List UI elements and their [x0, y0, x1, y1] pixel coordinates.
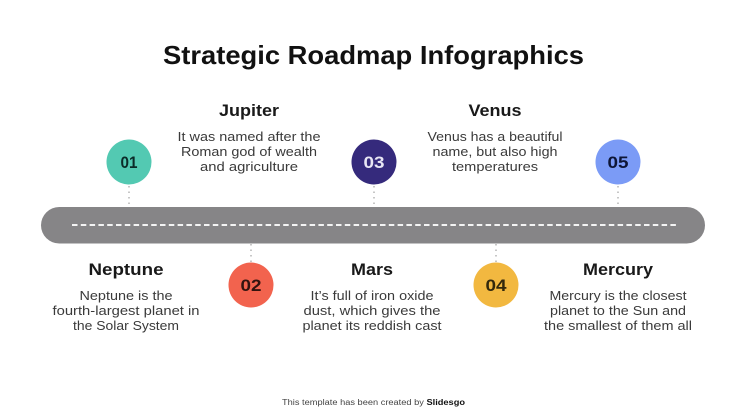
- milestone 05 marker: 05: [608, 153, 628, 172]
- text block: Mercury: [544, 261, 692, 333]
- milestone 01 marker: 01: [120, 153, 138, 172]
- milestone 04 marker: 04: [486, 276, 507, 295]
- text block: Venus: Venus has a beautiful: [428, 129, 563, 144]
- milestone 03 marker: 03: [364, 153, 384, 172]
- text block: Jupiter: [178, 102, 320, 174]
- text block: Neptune: the Solar System: [73, 318, 179, 333]
- text block: Neptune: Neptune is the: [80, 288, 172, 303]
- text block: Neptune: Neptune: [88, 261, 164, 279]
- text block: Venus: name, but also high: [432, 144, 558, 159]
- milestone 05 marker: [596, 140, 640, 206]
- title: Strategic Roadmap Infographics: [163, 40, 584, 70]
- text block: Neptune: fourth-largest planet in: [52, 303, 200, 318]
- road timeline: [41, 207, 705, 244]
- text block: Mercury: the smallest of them all: [544, 318, 692, 333]
- milestone 02 marker: 02: [240, 276, 262, 295]
- text block: Jupiter: Roman god of wealth: [181, 144, 317, 159]
- milestone 01 marker: [106, 140, 152, 206]
- milestone 03 marker: [352, 140, 396, 206]
- text block: Venus: [428, 102, 563, 174]
- text block: Jupiter: and agriculture: [200, 159, 298, 174]
- text block: Mercury: Mercury: [583, 261, 654, 279]
- text block: Jupiter: It was named after the: [178, 129, 320, 144]
- footer credit: This template has been created by Slidesgo: [282, 398, 465, 407]
- text block: Mars: planet its reddish cast: [302, 318, 442, 333]
- milestone 02 marker: [228, 244, 274, 308]
- text block: Mercury: Mercury is the closest: [550, 288, 687, 303]
- text block: Mars: dust, which gives the: [304, 303, 440, 318]
- text block: Mercury: planet to the Sun and: [550, 303, 686, 318]
- text block: Mars: It’s full of iron oxide: [310, 288, 434, 303]
- text block: Neptune: [52, 261, 200, 333]
- text block: Jupiter: Jupiter: [219, 102, 280, 120]
- text block: Venus: Venus: [468, 102, 522, 120]
- text block: Mars: Mars: [351, 261, 393, 279]
- text block: Venus: temperatures: [452, 159, 539, 174]
- text block: Mars: [302, 261, 442, 333]
- milestone 04 marker: [474, 244, 518, 308]
